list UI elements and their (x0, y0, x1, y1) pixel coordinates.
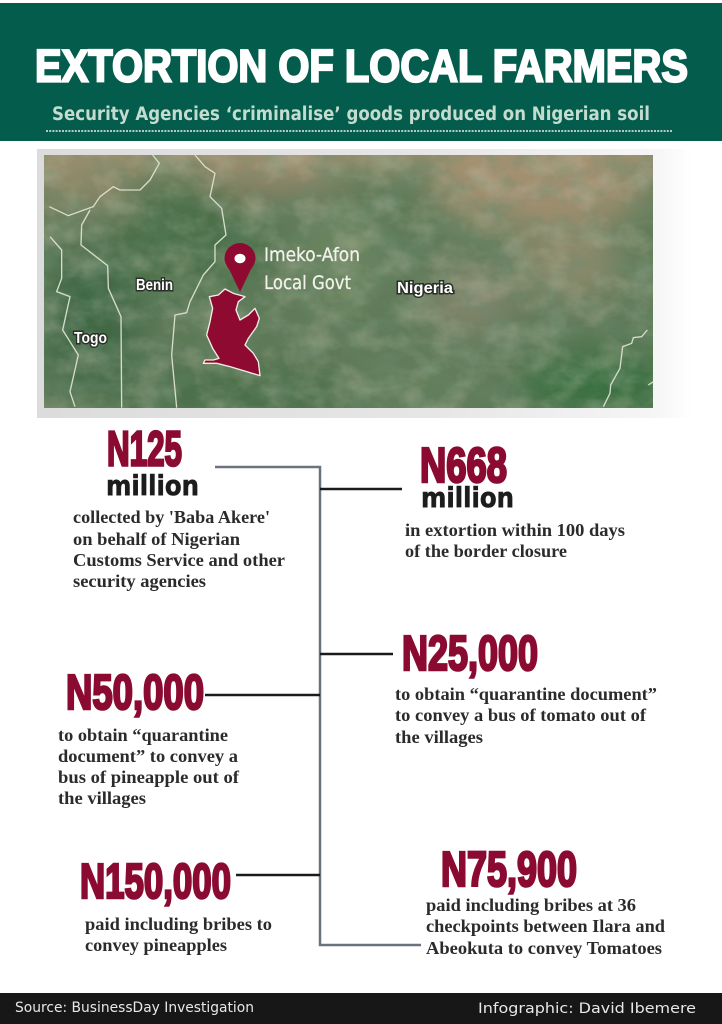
stat: N25,000 (395, 627, 657, 747)
stat: N75,900: Abeokuta to convey Tomatoes (426, 938, 662, 958)
stat: N125 million: security agencies (73, 571, 206, 591)
stat: N75,900: checkpoints between Ilara and (426, 916, 665, 936)
map label: Togo: Togo (74, 330, 107, 347)
stat: N75,900: N75,900 (441, 843, 577, 897)
map label: Nigeria: Nigeria (397, 280, 453, 297)
stat: N150,000 (80, 855, 272, 955)
map label: Imeko-Afon Local Govt (264, 244, 360, 294)
icon: Imeko-Afon region shape (203, 289, 260, 376)
map label: Benin: Benin (136, 277, 173, 294)
source credit: Source: BusinessDay Investigation (15, 1000, 254, 1016)
stat: N25,000: to convey a bus of tomato out of (395, 705, 647, 725)
map borders (49, 155, 653, 408)
stat: N668 million: of the border closure (405, 541, 567, 561)
stat: N125 million (73, 422, 285, 591)
stat: N150,000: paid including bribes to (85, 914, 272, 934)
stat: N125 million: N125 (107, 422, 182, 476)
stat: N75,900: paid including bribes at 36 (426, 895, 636, 915)
stat: N50,000: N50,000 (66, 666, 204, 720)
stat: N25,000: to obtain “quarantine document” (395, 684, 657, 704)
stat: N668 million: N668 (420, 439, 507, 493)
map label: Imeko-Afon Local Govt: Imeko-Afon (264, 244, 360, 266)
stat: N50,000: the villages (58, 788, 146, 808)
stat: N668 million: million (421, 481, 514, 514)
stat: N125 million: on behalf of Nigerian (73, 529, 240, 549)
stat: N125 million: collected by 'Baba Akere' (73, 507, 270, 527)
infographic credit: Infographic: David Ibemere (478, 1001, 696, 1017)
stat: N75,900 (426, 843, 665, 958)
connector tree (205, 467, 421, 945)
footer bar (0, 993, 722, 1024)
header banner (0, 3, 722, 141)
icon: location pin (224, 243, 256, 292)
stat: N150,000: N150,000 (80, 855, 231, 909)
panel: satellite map (37, 149, 662, 418)
stat: N150,000: convey pineapples (85, 935, 227, 955)
stat: N50,000 (58, 666, 240, 808)
stat: N668 million: in extortion within 100 days (405, 520, 625, 540)
stat: N25,000: the villages (395, 727, 483, 747)
stat: N50,000: bus of pineapple out of (58, 767, 240, 787)
stat: N125 million: Customs Service and other (73, 550, 285, 570)
subtitle: Security Agencies ‘criminalise’ goods produced on Nigerian soil (52, 104, 650, 125)
stat: N668 million (405, 439, 625, 561)
stat: N50,000: document” to convey a (58, 746, 238, 766)
stat: N125 million: million (106, 469, 199, 502)
stat: N50,000: to obtain “quarantine (58, 725, 228, 745)
stat: N25,000: N25,000 (402, 627, 538, 681)
map label: Imeko-Afon Local Govt: Local Govt (264, 272, 351, 294)
